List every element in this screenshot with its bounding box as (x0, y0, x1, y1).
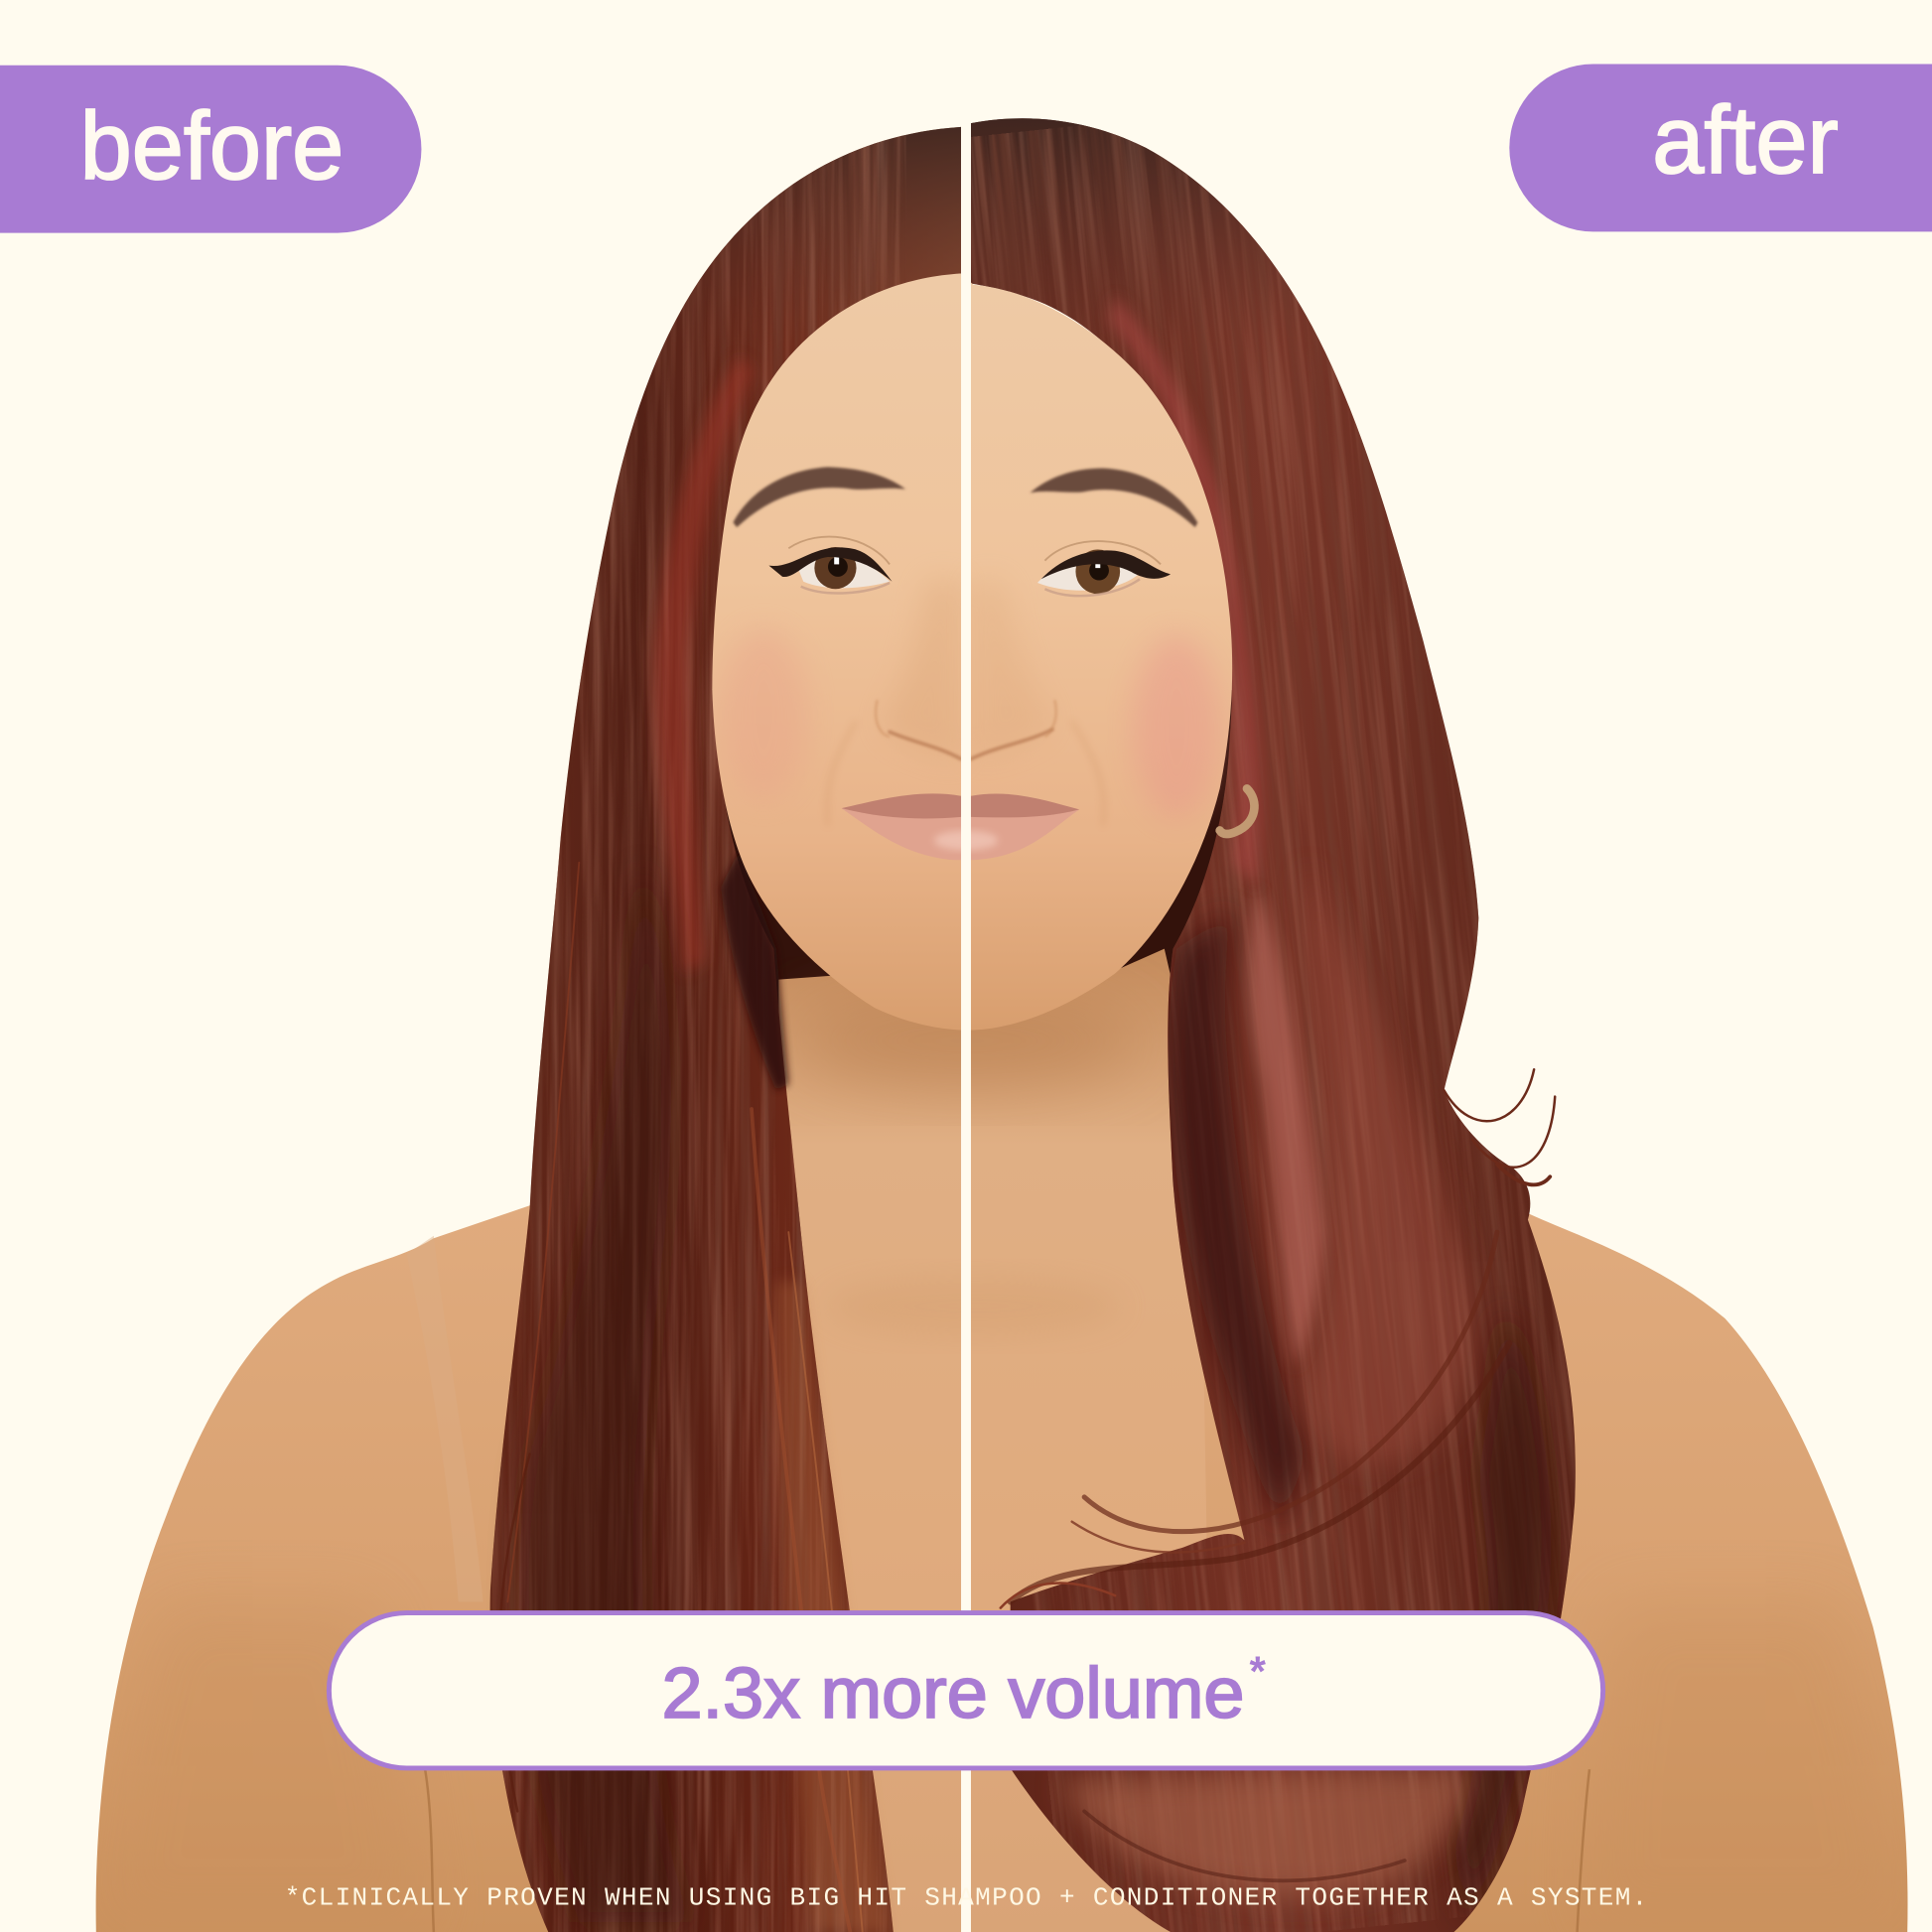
clinical footnote: *CLINICALLY PROVEN WHEN USING BIG HIT SHAMPOO + CONDITIONER TOGETHER AS A SYSTEM. (285, 1883, 1647, 1913)
hair mass right (971, 118, 1576, 1932)
hair: before side (481, 123, 961, 1932)
left eyebrow (733, 467, 905, 527)
top strap (407, 1236, 483, 1601)
red highlight left (653, 357, 755, 973)
nose shading (827, 579, 1104, 826)
right eyebrow (1031, 469, 1197, 527)
neck shadow (794, 995, 1140, 1088)
orange fringe left (776, 1282, 888, 1932)
hair mass left (490, 127, 961, 1932)
center divider line (961, 123, 971, 1932)
before label: before (80, 91, 344, 200)
volume claim badge (329, 1613, 1603, 1768)
volume claim badge: 2.3x more volume (661, 1654, 1244, 1733)
face (712, 274, 1232, 1031)
after label: after (1652, 85, 1839, 194)
cheek blush (720, 628, 1221, 819)
hair root shading left (490, 127, 961, 1932)
mid-length sheen right (1307, 863, 1474, 1463)
hair root shading right (971, 118, 1576, 1932)
volume claim badge: * (1249, 1648, 1266, 1695)
neck (770, 949, 1213, 1932)
hair texture right (971, 125, 1575, 1932)
flyaway strands right (1001, 1069, 1555, 1880)
hair strands left (499, 863, 863, 1932)
left eye (768, 537, 893, 593)
curled layer bottom right (1059, 1768, 1472, 1896)
shadow by jaw left (721, 850, 788, 1090)
hoop earring (1220, 788, 1254, 834)
lips (842, 793, 1079, 860)
before label (0, 66, 421, 233)
red highlight right (1109, 296, 1261, 888)
bare shoulders and torso (96, 1201, 1907, 1932)
after label (1509, 65, 1932, 231)
arm and torso shading (96, 1601, 1907, 1932)
dark under layer right (1169, 911, 1307, 1528)
hair: after side (971, 118, 1576, 1932)
pink sheen right (1248, 888, 1324, 1368)
dark ends right (1453, 1307, 1551, 1922)
dark hair behind neck (709, 690, 1282, 1355)
hair texture left (481, 123, 905, 1932)
right eye (1037, 541, 1171, 596)
dark lowlight left (519, 863, 690, 1922)
collarbone shading (826, 1277, 1121, 1335)
